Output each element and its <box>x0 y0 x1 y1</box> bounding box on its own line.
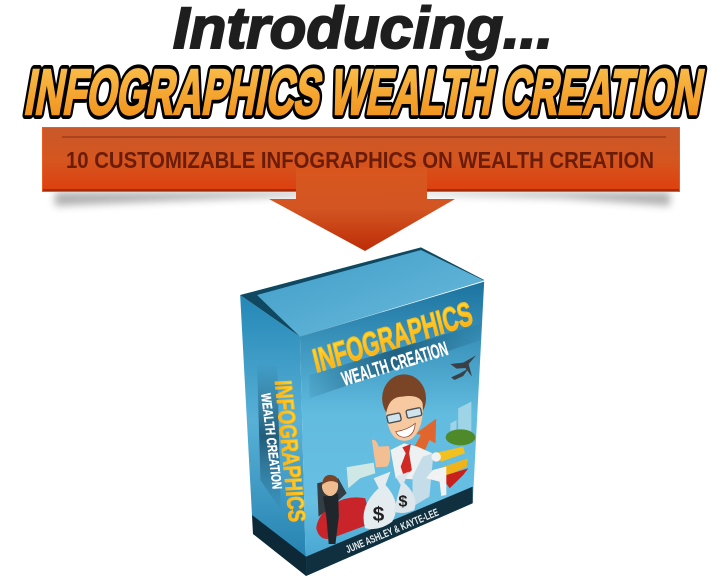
box front face <box>300 282 484 576</box>
smile <box>396 423 415 437</box>
box left face <box>240 295 306 576</box>
plane large <box>450 355 476 377</box>
pagoda red base <box>441 468 468 488</box>
banner rule <box>62 136 666 138</box>
right lens <box>406 407 422 418</box>
dollar large: $ <box>373 503 385 526</box>
buildings <box>450 402 471 443</box>
rising orange arrow <box>401 419 436 478</box>
money bags <box>364 472 415 529</box>
short tower <box>450 420 456 440</box>
face <box>386 396 423 441</box>
side subtitle: WEALTH CREATION <box>258 393 285 489</box>
screen behind man <box>317 478 347 517</box>
tie <box>401 444 412 477</box>
tree <box>446 429 475 445</box>
bar chart <box>413 453 433 507</box>
side title band <box>257 363 281 510</box>
left lens <box>387 413 401 423</box>
product title <box>21 56 709 128</box>
red car <box>316 497 372 539</box>
glasses <box>387 407 422 423</box>
front bottom band <box>306 487 473 576</box>
tall tower <box>458 402 471 443</box>
man hair <box>322 475 338 485</box>
plane small <box>451 368 469 380</box>
banner bottom edge <box>43 189 679 191</box>
pagoda roof lower <box>434 458 468 478</box>
white figure <box>426 452 446 496</box>
bag large <box>364 472 396 529</box>
side title: INFOGRAPHICS <box>270 380 310 523</box>
thumbs up hand <box>372 440 390 467</box>
plane <box>450 355 476 380</box>
author line: JUNE ASHLEY & KAYTE-LEE <box>344 507 441 556</box>
down arrow <box>269 167 455 251</box>
product box <box>240 247 484 576</box>
box top dark flap <box>240 247 484 337</box>
man suit <box>323 493 339 544</box>
front subtitle: WEALTH CREATION <box>339 338 451 391</box>
front title: INFOGRAPHICS <box>309 296 476 380</box>
website screen <box>347 463 375 488</box>
dollar small: $ <box>398 493 407 511</box>
banner <box>42 128 680 192</box>
left bottom band <box>252 515 306 576</box>
gold pagoda <box>434 447 468 488</box>
front title band <box>309 323 482 398</box>
banner panel <box>42 128 680 192</box>
banner shadow <box>55 192 670 206</box>
man head <box>322 476 338 496</box>
pagoda roof upper <box>434 447 465 462</box>
small man <box>317 475 347 544</box>
hair back <box>382 374 426 422</box>
bag small <box>394 472 415 513</box>
shirt <box>391 443 432 480</box>
businessman <box>372 374 432 480</box>
box top light panel <box>257 250 484 337</box>
